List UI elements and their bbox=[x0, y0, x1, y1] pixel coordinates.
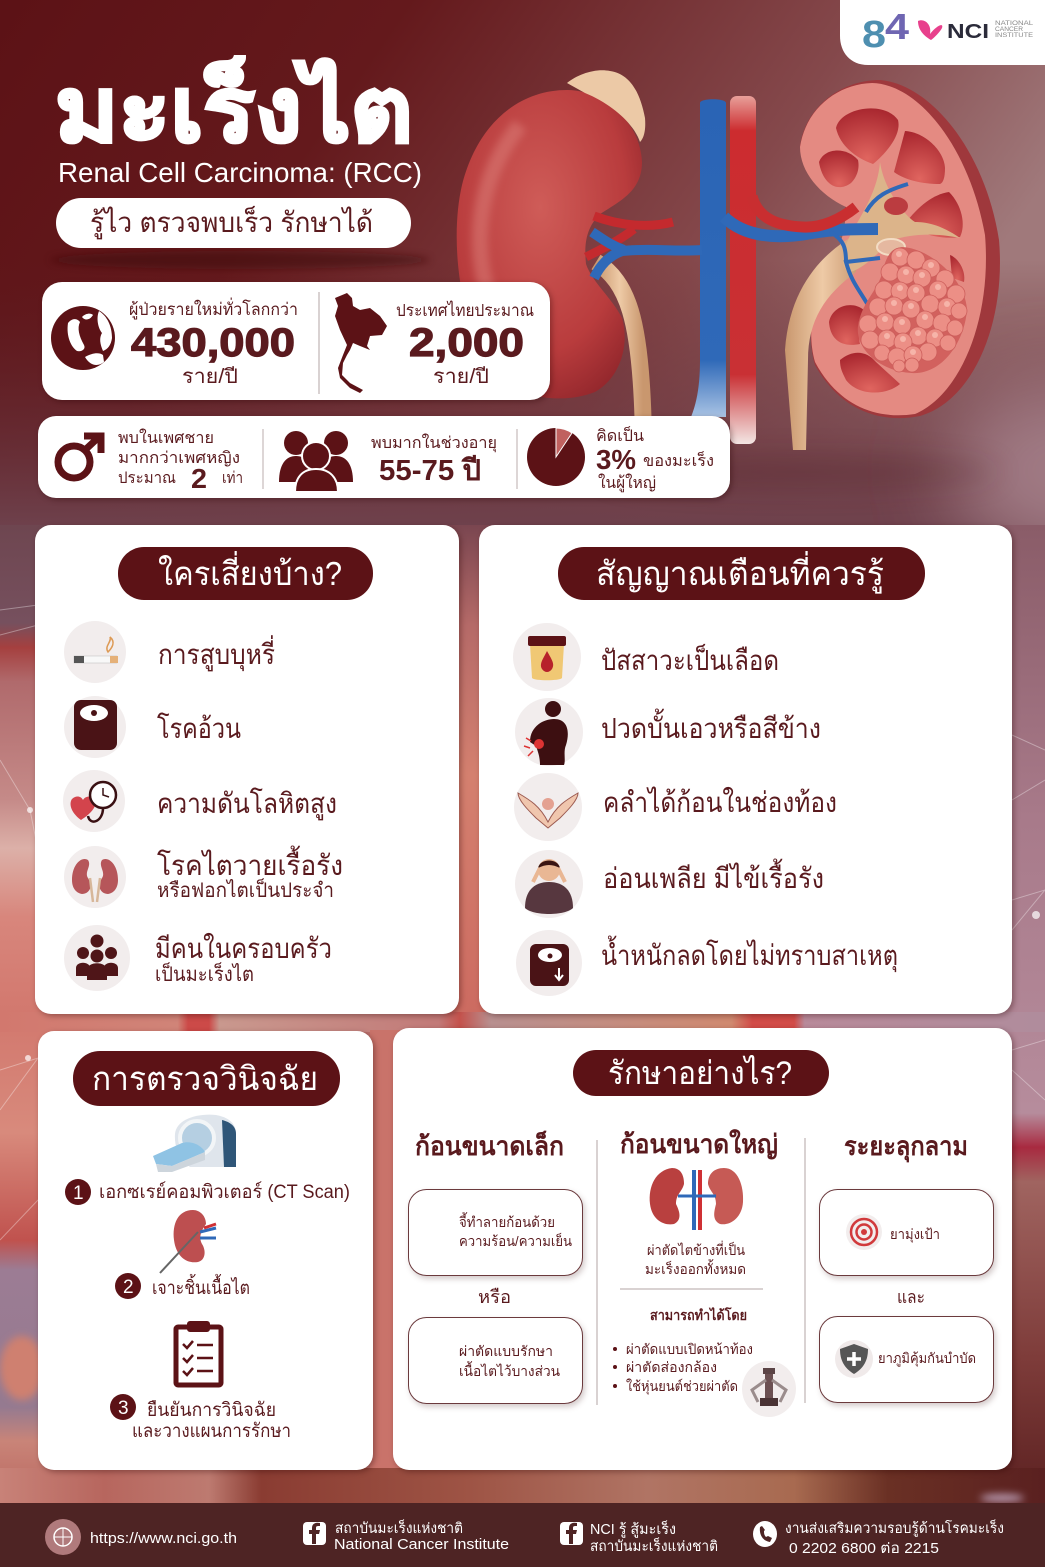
heading: ใครเสี่ยงบ้าง? bbox=[158, 551, 342, 592]
icon: clipboard bbox=[176, 1322, 221, 1385]
left kidney bbox=[457, 90, 642, 398]
column: large tumor: สามารถทำได้โดย bbox=[650, 1306, 747, 1323]
surgery options: ใช้หุ่นยนต์ช่วยผ่าตัด bbox=[626, 1378, 738, 1395]
logo card bbox=[840, 0, 1045, 65]
facebook: NCI bbox=[560, 1519, 718, 1555]
share text: 3% bbox=[596, 444, 636, 475]
item: fatigue and fever bbox=[515, 850, 824, 918]
column: advanced stage: และ bbox=[897, 1287, 925, 1307]
heading bbox=[573, 1050, 829, 1096]
item: smoking bbox=[64, 621, 275, 683]
phone contact bbox=[753, 1518, 1004, 1557]
phone contact: งานส่งเสริมความรอบรู้ด้านโรคมะเร็ง bbox=[785, 1518, 1004, 1537]
option: targeted therapy bbox=[820, 1190, 994, 1276]
facebook: institute: สถาบันมะเร็งแห่งชาติ bbox=[335, 1518, 463, 1537]
Thailand stat bbox=[396, 300, 534, 388]
option: immunotherapy: ยาภูมิคุ้มกันบำบัด bbox=[878, 1350, 976, 1367]
item: family history bbox=[64, 925, 332, 991]
gender text: พบในเพศชาย bbox=[118, 428, 214, 447]
renal artery left bbox=[586, 216, 673, 257]
right ureter bbox=[785, 232, 860, 450]
item: flank pain bbox=[515, 698, 821, 766]
option: immunotherapy bbox=[820, 1316, 994, 1402]
item: blood in urine: ปัสสาวะเป็นเลือด bbox=[601, 643, 779, 676]
logo 84 bbox=[862, 6, 909, 56]
item: abdominal mass: คลำได้ก้อนในช่องท้อง bbox=[603, 786, 837, 818]
panel: diagnosis bbox=[38, 1031, 373, 1470]
surgery options: ผ่าตัดส่องกล้อง bbox=[626, 1359, 717, 1375]
item: hypertension bbox=[63, 770, 337, 832]
item: abdominal mass bbox=[514, 773, 837, 841]
item: blood in urine bbox=[513, 623, 779, 691]
heading bbox=[118, 547, 373, 600]
Thailand stat: ราย/ปี bbox=[433, 366, 489, 388]
heading bbox=[73, 1051, 340, 1106]
world stat: ผู้ป่วยรายใหม่ทั่วโลกกว่า bbox=[129, 297, 298, 320]
icon: mini kidneys bbox=[650, 1168, 743, 1230]
gender text: 2 bbox=[191, 463, 207, 494]
column: large tumor: ผ่าตัดไตข้างที่เป็น bbox=[647, 1241, 745, 1258]
title: มะเร็งไต bbox=[55, 55, 413, 161]
step 2: 2 bbox=[123, 1277, 134, 1298]
icon: male symbol bbox=[58, 436, 101, 478]
logo 84: 4 bbox=[885, 6, 909, 47]
Thailand stat: ประเทศไทยประมาณ bbox=[396, 300, 534, 320]
heading: สัญญาณเตือนที่ควรรู้ bbox=[596, 551, 884, 594]
step 3: 3 bbox=[118, 1398, 129, 1419]
heading: รักษาอย่างไร? bbox=[608, 1055, 792, 1091]
column: large tumor: มะเร็งออกทั้งหมด bbox=[645, 1259, 746, 1277]
stats card: demographics bbox=[38, 416, 730, 498]
website: https://www.nci.go.th bbox=[90, 1530, 237, 1547]
step 2: เจาะชิ้นเนื้อไต bbox=[152, 1274, 250, 1299]
icon: people bbox=[279, 431, 353, 492]
logo NCI: INSTITUTE bbox=[995, 33, 1033, 39]
step 3 bbox=[110, 1394, 291, 1442]
phone contact: 0 2202 6800 ต่อ 2215 bbox=[789, 1541, 939, 1557]
logo 84: 8 bbox=[862, 14, 886, 56]
share text: ของมะเร็ง bbox=[643, 450, 714, 470]
item: fatigue and fever: อ่อนเพลีย มีไข้เรื้อรัง bbox=[603, 858, 824, 894]
item: obesity bbox=[64, 696, 241, 758]
item: chronic kidney failure bbox=[64, 845, 343, 908]
world stat bbox=[129, 297, 298, 388]
age text bbox=[371, 433, 497, 487]
option: partial nephrectomy: เนื้อไตไว้บางส่วน bbox=[459, 1361, 560, 1379]
step 1: 1 bbox=[73, 1183, 84, 1204]
vena cava bbox=[691, 99, 726, 417]
option: ablation: ความร้อน/ความเย็น bbox=[459, 1232, 572, 1249]
right kidney outer bbox=[800, 80, 1000, 418]
item: obesity: โรคอ้วน bbox=[157, 712, 241, 744]
age text: 55-75 ปี bbox=[379, 455, 481, 487]
logo NCI: NATIONAL bbox=[995, 21, 1034, 27]
icon: kidney biopsy bbox=[160, 1210, 216, 1273]
website bbox=[45, 1519, 237, 1555]
footer bbox=[0, 1503, 1045, 1567]
column: small tumor bbox=[408, 1130, 582, 1404]
column: advanced stage bbox=[820, 1131, 994, 1402]
facebook: institute bbox=[303, 1518, 509, 1553]
item: chronic kidney failure: หรือฟอกไตเป็นประจำ bbox=[157, 877, 334, 902]
step 1 bbox=[65, 1179, 350, 1205]
column: advanced stage: ระยะลุกลาม bbox=[844, 1131, 968, 1163]
renal pelvis bbox=[843, 162, 960, 272]
option: ablation bbox=[408, 1190, 582, 1276]
blue branch bbox=[724, 217, 878, 236]
gender text bbox=[118, 428, 243, 494]
world stat: ราย/ปี bbox=[182, 366, 238, 388]
panel: who is at risk bbox=[35, 525, 459, 1014]
pie chart bbox=[527, 428, 585, 486]
heading: การตรวจวินิจฉัย bbox=[92, 1060, 318, 1097]
aorta bbox=[730, 96, 756, 444]
panel: warning signs bbox=[479, 525, 1012, 1014]
logo NCI bbox=[918, 20, 1034, 43]
heading bbox=[558, 547, 925, 600]
item: family history: มีคนในครอบครัว bbox=[155, 932, 332, 964]
step 3: ยืนยันการวินิจฉัย bbox=[147, 1400, 276, 1421]
subtitle: Renal Cell Carcinoma: (RCC) bbox=[58, 157, 422, 188]
tagline pill bbox=[56, 198, 411, 248]
age text: พบมากในช่วงอายุ bbox=[371, 433, 497, 453]
column: large tumor: ก้อนขนาดใหญ่ bbox=[620, 1129, 778, 1160]
column: small tumor: หรือ bbox=[478, 1287, 511, 1307]
item: weight loss: น้ำหนักลดโดยไม่ทราบสาเหตุ bbox=[601, 935, 898, 973]
share text: คิดเป็น bbox=[596, 425, 644, 445]
step 2 bbox=[115, 1273, 250, 1299]
step 1: เอกซเรย์คอมพิวเตอร์ (CT Scan) bbox=[99, 1181, 350, 1203]
panel: treatment bbox=[393, 1028, 1012, 1470]
item: weight loss bbox=[516, 930, 898, 996]
step 3: และวางแผนการรักษา bbox=[132, 1421, 291, 1442]
red branch bbox=[752, 196, 856, 227]
icon: Thailand map bbox=[335, 293, 387, 393]
item: flank pain: ปวดบั้นเอวหรือสีข้าง bbox=[601, 708, 821, 744]
column: small tumor: ก้อนขนาดเล็ก bbox=[415, 1130, 564, 1161]
ureter left bbox=[596, 262, 643, 418]
Thailand stat: 2,000 bbox=[409, 321, 524, 365]
option: partial nephrectomy bbox=[408, 1318, 582, 1404]
gender text: เท่า bbox=[222, 470, 243, 487]
icon: surgical robot bbox=[742, 1361, 796, 1417]
option: partial nephrectomy: ผ่าตัดแบบรักษา bbox=[459, 1343, 553, 1359]
gender text: มากกว่าเพศหญิง bbox=[118, 450, 240, 467]
tagline pill: รู้ไว ตรวจพบเร็ว รักษาได้ bbox=[90, 205, 373, 240]
item: chronic kidney failure: โรคไตวายเรื้อรัง bbox=[157, 845, 343, 881]
world stat: 430,000 bbox=[131, 321, 295, 365]
facebook: NCI: NCI รู้ สู้มะเร็ง bbox=[590, 1519, 676, 1538]
column: large tumor bbox=[613, 1129, 796, 1417]
option: targeted therapy: ยามุ่งเป้า bbox=[890, 1226, 940, 1243]
gender text: ประมาณ bbox=[118, 470, 176, 487]
right kidney cut face bbox=[800, 83, 986, 415]
share text bbox=[596, 425, 714, 493]
item: family history: เป็นมะเร็งไต bbox=[155, 961, 254, 986]
item: smoking: การสูบบุหรี่ bbox=[158, 635, 275, 672]
stats card: incidence bbox=[42, 282, 550, 400]
logo NCI: CANCER bbox=[995, 27, 1024, 33]
share text: ในผู้ใหญ่ bbox=[598, 473, 656, 493]
facebook: institute: National Cancer Institute bbox=[334, 1537, 509, 1553]
item: hypertension: ความดันโลหิตสูง bbox=[157, 787, 337, 821]
surgery options: ผ่าตัดแบบเปิดหน้าท้อง bbox=[626, 1341, 753, 1357]
kidney illustration bbox=[457, 70, 1000, 450]
adrenal gland bbox=[567, 70, 645, 142]
facebook: NCI: สถาบันมะเร็งแห่งชาติ bbox=[590, 1536, 718, 1555]
renal pyramids bbox=[819, 108, 964, 393]
logo NCI: NCI bbox=[947, 21, 989, 43]
option: ablation: จี้ทำลายก้อนด้วย bbox=[459, 1212, 555, 1230]
icon: globe bbox=[51, 306, 115, 370]
tumor bbox=[858, 247, 967, 373]
surgery options bbox=[613, 1341, 753, 1395]
icon: CT scanner bbox=[153, 1115, 236, 1172]
